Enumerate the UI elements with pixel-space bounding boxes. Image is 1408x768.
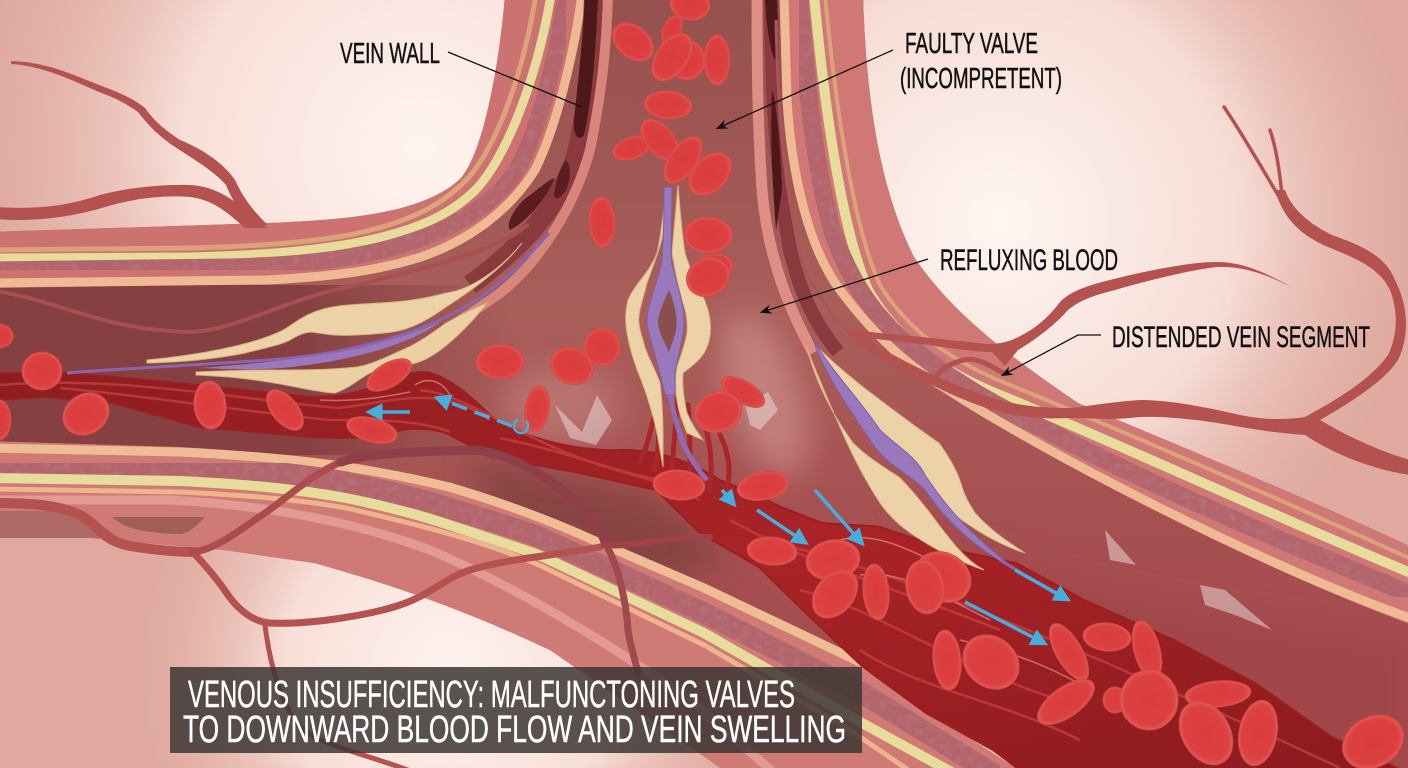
label: refluxing blood	[762, 244, 1118, 312]
refluxing blood flow band	[0, 372, 1408, 768]
vessel: right branches	[850, 107, 1408, 475]
label: distended vein segment	[1003, 321, 1370, 375]
arrow: dashed reflux	[440, 399, 512, 426]
arrow: down 4	[965, 602, 1042, 642]
arrow: down 2	[757, 510, 803, 541]
label: refluxing blood: REFLUXING BLOOD	[940, 244, 1118, 277]
translucent shards	[555, 392, 1272, 630]
label: faulty valve	[718, 28, 1062, 128]
vessel: upper left	[0, 61, 268, 228]
icon: reflux origin ring	[514, 419, 528, 433]
label: vein wall	[340, 38, 582, 107]
caption banner: TO DOWNWARD BLOOD FLOW AND VEIN SWELLING	[183, 709, 846, 751]
vessel: lumen branch left	[0, 225, 527, 332]
arrow: down 3	[815, 490, 860, 541]
lower vein wall	[0, 441, 1030, 768]
caption banner	[170, 667, 862, 753]
valve: central leaflets (faulty)	[626, 185, 711, 480]
label: faulty valve: (INCOMPRETENT)	[900, 63, 1062, 95]
label: faulty valve: FAULTY VALVE	[905, 28, 1038, 60]
arrow: left 1	[372, 410, 410, 414]
arrow: down 1	[722, 490, 732, 502]
valve: left arm leaflets	[67, 233, 549, 393]
blue flow arrows	[372, 399, 1065, 642]
vessel: lower left and junction	[0, 450, 710, 768]
label: vein wall: VEIN WALL	[340, 38, 440, 70]
right vein wall	[757, 0, 1408, 627]
valve: right arm leaflets	[806, 340, 1061, 597]
caption banner: VENOUS INSUFFICIENCY: MALFUNCTONING VALVES	[188, 674, 795, 716]
arrow: down 5	[1015, 570, 1065, 598]
upper-left vein wall	[0, 0, 608, 338]
